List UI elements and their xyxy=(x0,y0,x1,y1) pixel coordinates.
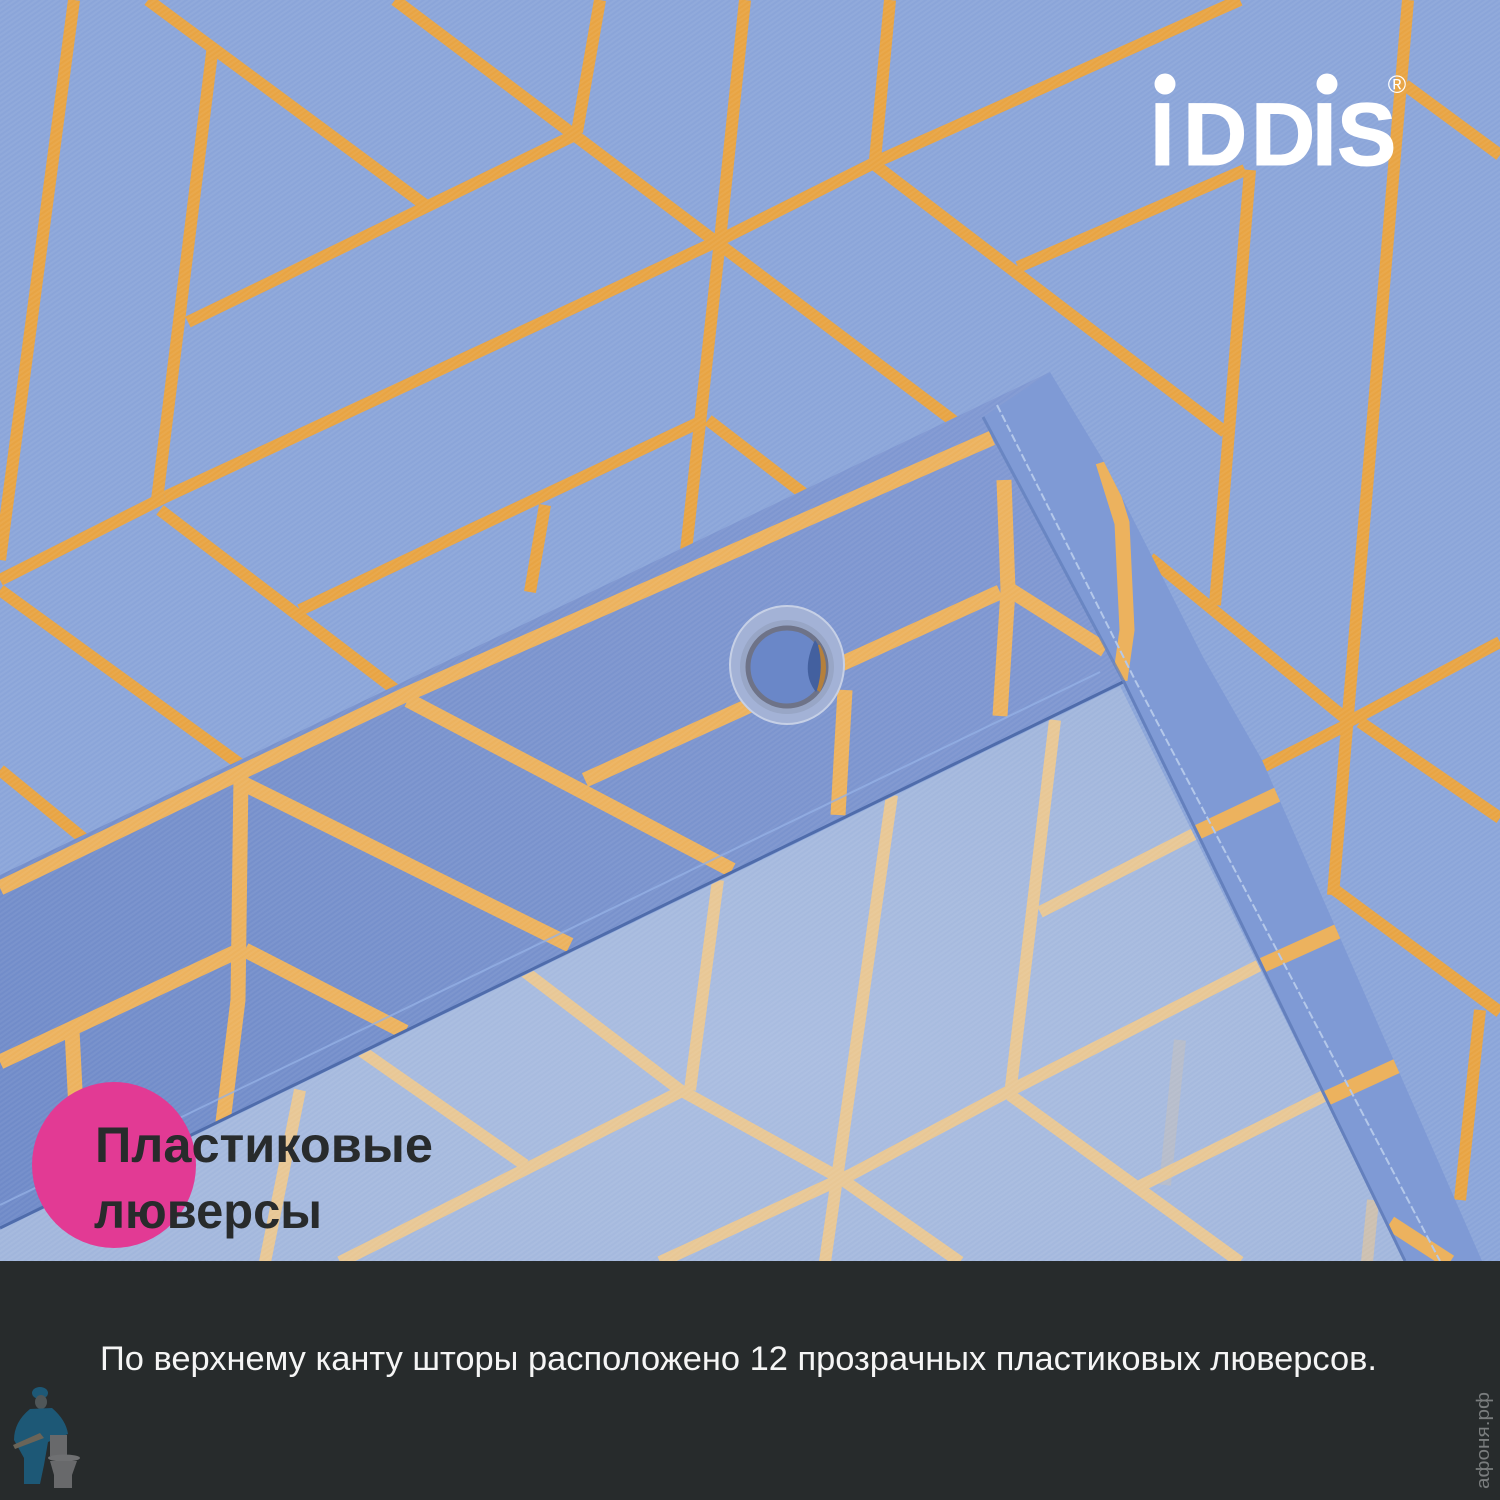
heading: plastic grommets: люверсы xyxy=(94,1182,322,1239)
logo: IDDIS xyxy=(1150,71,1407,184)
gold geometric pattern on fabric xyxy=(0,0,1500,1200)
logo: IDDIS: S xyxy=(1337,84,1396,184)
logo: IDDIS: I xyxy=(1312,84,1337,184)
heading: plastic grommets: Пластиковые xyxy=(95,1116,433,1173)
logo: IDDIS: ® xyxy=(1388,71,1407,99)
panel: sheer curtain underside xyxy=(0,686,1500,1262)
logo: IDDIS: I xyxy=(1150,84,1175,184)
icon: transparent plastic grommet xyxy=(730,606,844,724)
logo: IDDIS: D xyxy=(1183,84,1247,184)
footer description: По верхнему канту шторы расположено 12 прозрачных пластиковых люверсов. xyxy=(100,1340,1377,1378)
logo: IDDIS: D xyxy=(1251,84,1315,184)
watermark: afonya.rf: афоня.рф xyxy=(1473,1392,1493,1489)
panel: dark footer band xyxy=(0,1261,1500,1500)
icon: plumber with toilet xyxy=(13,1387,80,1488)
pink accent circle xyxy=(32,1082,196,1248)
heading: plastic grommets xyxy=(94,1116,433,1239)
panel: side hem strip with stitching xyxy=(983,372,1482,1262)
panel: folded hem band xyxy=(0,370,1130,1230)
